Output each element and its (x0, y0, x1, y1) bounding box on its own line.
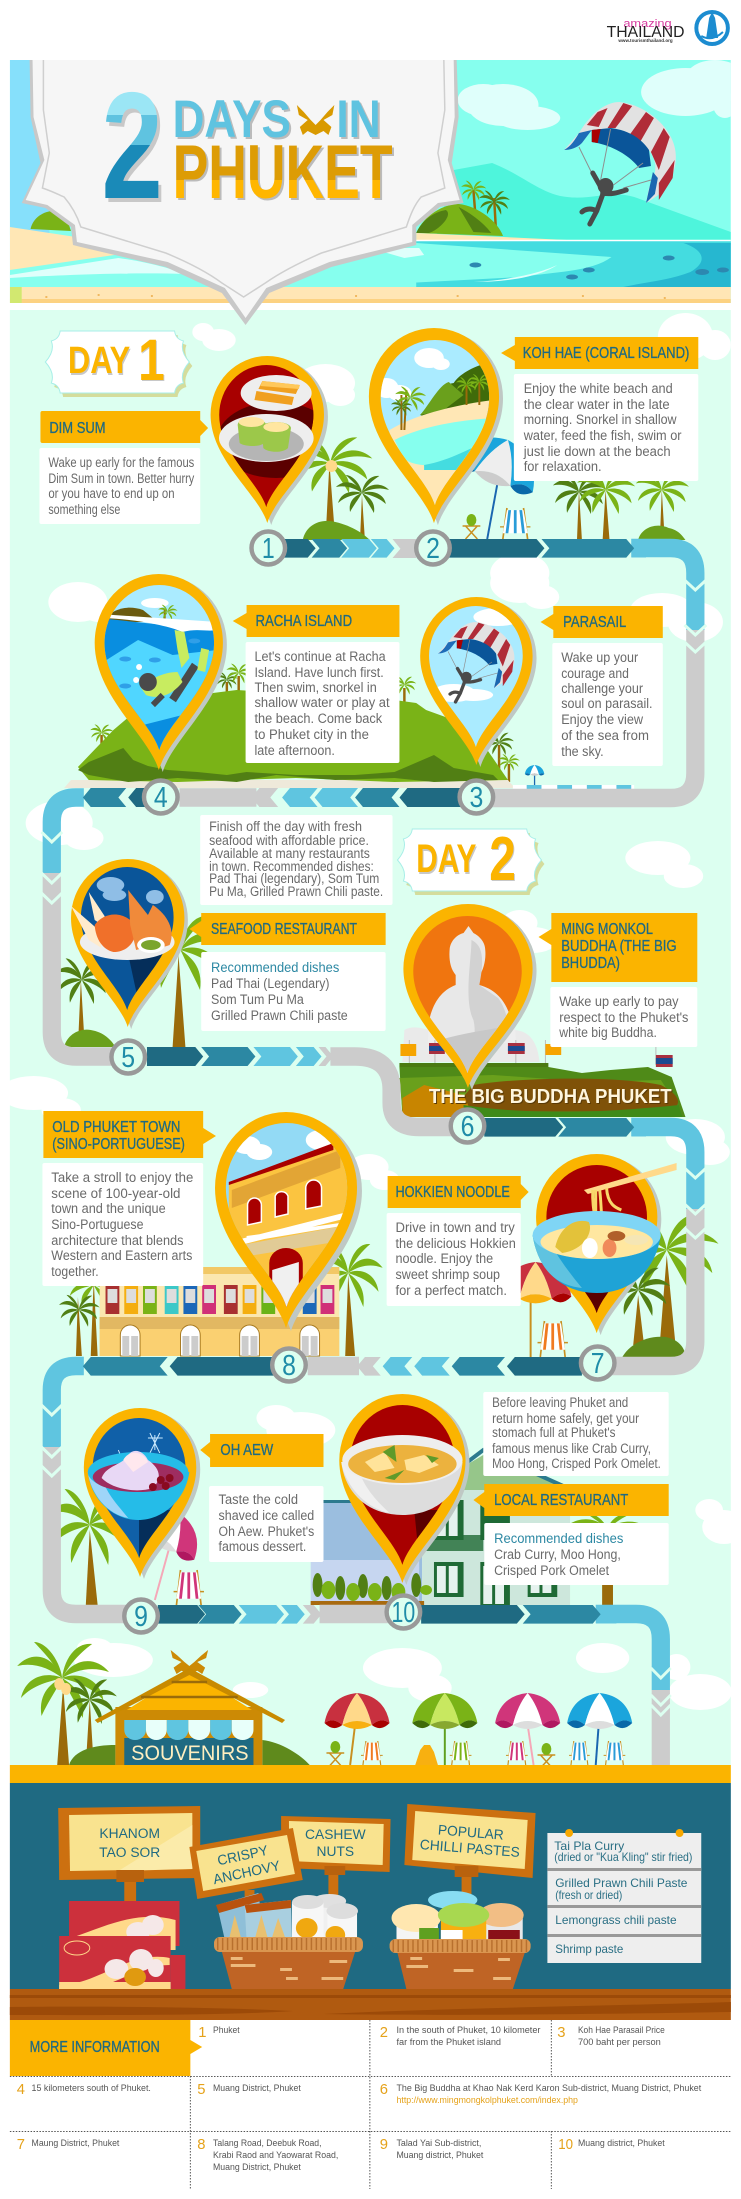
dish: dumplings (219, 414, 314, 462)
route markers 1 to 10: 1 (262, 533, 275, 565)
logo: amazing Thailand: www.tourismthailand.org (617, 38, 673, 43)
more information table: http://www.mingmongkolphuket.com/index.php (396, 2094, 578, 2105)
panel: local restaurant: return home safely, get your (492, 1411, 640, 1426)
clouds (0, 313, 741, 1710)
panel: local restaurant: Moo Hong, Crisped Pork Omelet. (492, 1456, 661, 1471)
pin 2: koh hae island (369, 328, 503, 525)
route: chevron segments (83, 539, 646, 1624)
panel: parasail: the sky. (561, 744, 604, 759)
route: vertical chevrons (41, 580, 706, 1715)
panel: old phuket town (42, 1111, 216, 1286)
panel: parasail: PARASAIL (563, 614, 627, 631)
panel: old phuket town: (SINO-PORTUGUESE) (52, 1136, 185, 1153)
title: 2 Days in Phuket (102, 60, 395, 234)
pin 3: parasail (420, 597, 537, 767)
panel: old phuket town: town and the unique (51, 1201, 166, 1216)
panel: dim sum: Wake up early for the famous (48, 455, 195, 470)
logo: amazing Thailand (607, 18, 684, 43)
panel: old phuket town: architecture that blends (51, 1233, 184, 1248)
logo: amazing Thailand: amazing (623, 18, 672, 30)
note board: popular chilli pastes list: Tai Pla Curry (554, 1841, 625, 1853)
shelf band (10, 1765, 731, 1989)
scene: old town shophouses (59, 1242, 383, 1356)
panel: ming monkol buddha (539, 913, 697, 1047)
panel: local restaurant (473, 1392, 669, 1585)
route markers 1 to 10: 10 (392, 1597, 415, 1629)
panel: ming monkol buddha: MING MONKOL (561, 921, 653, 938)
pin 6: big buddha (403, 904, 537, 1090)
more information table: 3 (557, 2025, 565, 2041)
note board: popular chilli pastes list: Shrimp paste (555, 1944, 623, 1956)
panel: oh aew: OH AEW (220, 1442, 274, 1459)
logo: tourism authority seal (696, 12, 728, 44)
badge: day 1: DAY (68, 339, 130, 381)
panel: old phuket town: Sino-Portuguese (51, 1217, 144, 1232)
panel: dim sum: or you have to end up on (48, 486, 175, 501)
panel: koh hae: KOH HAE (CORAL ISLAND) (523, 345, 689, 362)
hero clouds (458, 60, 741, 130)
panel: seafood restaurant: in town. Recommended dishes: (209, 859, 374, 874)
title: 2 Days in Phuket: DAYS (175, 92, 293, 151)
badge: day 1 (45, 329, 192, 397)
dish: shaved ice (88, 1451, 189, 1520)
panel: seafood restaurant: Recommended dishes (211, 960, 340, 975)
title: 2 Days in Phuket: IN (338, 92, 383, 151)
panel: seafood restaurant: Available at many restaurants (209, 846, 370, 861)
panel: koh hae: water, feed the fish, swim or (523, 428, 682, 443)
pin 1: dim sum (211, 356, 335, 525)
note board: popular chilli pastes list: Grilled Prawn Chili Paste (555, 1878, 687, 1890)
more information table: 10 (558, 2137, 573, 2153)
hero mountains (434, 163, 731, 245)
panel: local restaurant: LOCAL RESTAURANT (494, 1492, 629, 1509)
more information table: 1 (198, 2025, 206, 2041)
panel: racha island: shallow water or play at (254, 695, 390, 710)
sign: cashew nuts (281, 1816, 391, 1898)
title: 2 Days in Phuket: 2 (102, 60, 163, 230)
heading: more information (10, 2020, 202, 2076)
more information table: 7 (17, 2137, 25, 2153)
route markers 1 to 10: 8 (282, 1350, 296, 1382)
souvenir row: palms, hut, umbrellas (17, 1642, 632, 1768)
more information table: Phuket (213, 2024, 240, 2035)
panel: hokkien noodle: noodle. Enjoy the (396, 1251, 493, 1266)
panel: old phuket town: Take a stroll to enjoy the (51, 1170, 193, 1185)
badge: day 2: 2 (490, 826, 517, 895)
panel: hokkien noodle: HOKKIEN NOODLE (396, 1184, 510, 1201)
scene: row one palms and beach (290, 424, 689, 540)
wooden shelf (10, 1989, 731, 2020)
icon: souvenir hut: SOUVENIRS (131, 1742, 249, 1765)
title: 2 Days in Phuket: IN (336, 90, 381, 149)
panel: local restaurant: Crisped Pork Omelet (494, 1563, 609, 1578)
panel: parasail: Enjoy the view (561, 712, 643, 727)
note board: popular chilli pastes list (547, 1829, 701, 1963)
sign: crispy anchovy (189, 1828, 303, 1904)
panel: parasail: Wake up your (561, 650, 639, 665)
panel: racha island (233, 605, 399, 763)
badge: day 2: DAY (416, 837, 476, 881)
panel: ming monkol buddha: respect to the Phuket's (559, 1010, 689, 1025)
panel: koh hae: Enjoy the white beach and (524, 381, 673, 396)
sign: khanom tao sor: TAO SOR (99, 1844, 160, 1860)
panel: dim sum (39, 411, 208, 524)
panel: koh hae (501, 337, 698, 481)
panel: racha island: late afternoon. (254, 743, 335, 758)
more information table: Muang District, Phuket (213, 2082, 301, 2093)
pin 8: old town (215, 1112, 362, 1331)
more information table: 8 (197, 2137, 205, 2153)
panel: racha island: Island. Have lunch first. (254, 665, 384, 680)
panel: oh aew: famous dessert. (219, 1539, 306, 1554)
dish: grilled prawns (71, 890, 175, 960)
route markers 1 to 10 (111, 532, 614, 1633)
panel: dim sum: something else (48, 502, 120, 517)
panel: koh hae: just lie down at the beach (523, 444, 671, 459)
panel: koh hae: for relaxation. (524, 459, 602, 474)
more information table: Krabi Raod and Yaowarat Road, (213, 2149, 338, 2160)
panel: racha island: the beach. Come back (254, 711, 382, 726)
dish: curry bowl (341, 1435, 463, 1515)
panel: koh hae: morning. Snorkel in shallow (524, 412, 677, 427)
route: grey and blue curves (52, 548, 695, 1765)
panel: oh aew (200, 1434, 324, 1562)
pin 4: racha island snorkel (95, 574, 227, 772)
hero palms and hill (416, 181, 510, 236)
panel: old phuket town: OLD PHUKET TOWN (52, 1119, 180, 1136)
panel: old phuket town: scene of 100-year-old (51, 1186, 180, 1201)
panel: hokkien noodle (387, 1176, 529, 1306)
parachute (564, 102, 676, 224)
heading: more information: MORE INFORMATION (30, 2039, 160, 2056)
scene: hokkien beach (500, 1212, 719, 1357)
hero sand strip (10, 287, 731, 303)
panel: oh aew: Oh Aew. Phuket's (219, 1524, 314, 1539)
panel: dim sum: Dim Sum in town. Better hurry (48, 471, 195, 486)
panel: hokkien noodle: for a perfect match. (396, 1283, 507, 1298)
panel: racha island: RACHA ISLAND (255, 613, 352, 630)
panel: oh aew: Taste the cold (219, 1492, 298, 1507)
route markers 1 to 10: 3 (469, 782, 483, 814)
panel: racha island: Then swim, snorkel in (254, 680, 377, 695)
route markers 1 to 10: 9 (134, 1601, 148, 1633)
more information table: Muang district, Phuket (578, 2137, 665, 2148)
title: 2 Days in Phuket: PHUKET (175, 132, 395, 216)
more information table: Talang Road, Deebuk Road, (213, 2137, 322, 2148)
more information table: Muang district, Phuket (396, 2149, 484, 2160)
title: 2 Days in Phuket: DAYS (173, 90, 291, 149)
panel: racha island: Let's continue at Racha (254, 649, 386, 664)
panel: local restaurant: Before leaving Phuket and (492, 1395, 628, 1410)
more information table: 2 (380, 2025, 388, 2041)
more information table: 700 baht per person (578, 2036, 661, 2047)
route markers 1 to 10: 2 (426, 533, 440, 565)
more information table: 9 (380, 2137, 388, 2153)
panel: hokkien noodle: Drive in town and try (396, 1220, 515, 1235)
icon: souvenir hut (95, 1650, 285, 1765)
sign text: the big buddha phuket: THE BIG BUDDHA PHUKET (429, 1086, 672, 1108)
badge: day 1: 1 (138, 329, 165, 393)
panel: seafood restaurant: Pad Thai (legendary), Som Tum (209, 871, 379, 886)
note board: popular chilli pastes list: (dried or "Kua Kling" stir fried) (554, 1852, 693, 1864)
more information table: Muang District, Phuket (213, 2161, 301, 2172)
route markers 1 to 10: 4 (154, 782, 168, 814)
more information table: 6 (380, 2082, 388, 2098)
pin 9: oh aew (84, 1408, 200, 1579)
route markers 1 to 10: 5 (121, 1042, 135, 1074)
more information table: 15 kilometers south of Phuket. (32, 2082, 151, 2093)
icon: snorkeller (133, 630, 209, 705)
panel: ming monkol buddha: BUDDHA (THE BIG (561, 938, 677, 955)
more information table: 5 (197, 2082, 205, 2098)
panel: parasail: of the sea from (561, 728, 649, 743)
panel: ming monkol buddha: Wake up early to pay (559, 994, 679, 1009)
panel: dim sum: DIM SUM (49, 420, 106, 437)
sign: crispy anchovy: ANCHOVY (212, 1857, 282, 1887)
more information table: Maung District, Phuket (32, 2137, 120, 2148)
panel: seafood restaurant: Som Tum Pu Ma (211, 992, 304, 1007)
sign: khanom tao sor (58, 1806, 200, 1905)
panel: seafood restaurant: SEAFOOD RESTAURANT (211, 921, 358, 938)
panel: hokkien noodle: sweet shrimp soup (396, 1267, 500, 1282)
scene: oh aew palm and umbrella (50, 1489, 211, 1606)
panel: ming monkol buddha: BHUDDA) (561, 955, 620, 972)
basket: chilli paste tubs (390, 1891, 531, 1989)
panel: parasail: soul on parasail. (561, 696, 653, 711)
panel: old phuket town: Western and Eastern arts (51, 1248, 193, 1263)
scene: local restaurant building (311, 1450, 647, 1606)
panel: oh aew: shaved ice called (219, 1508, 314, 1523)
pin 7: hokkien noodle (533, 1154, 677, 1335)
basket: crispy anchovy and cashew (214, 1893, 363, 1989)
panel: seafood restaurant (189, 815, 393, 1031)
more information table: Koh Hae Parasail Price (578, 2024, 665, 2035)
more information table: far from the Phuket island (396, 2036, 501, 2047)
sign: crispy anchovy: CRISPY (216, 1842, 269, 1868)
headband: banner shield (22, 60, 464, 325)
more information table: The Big Buddha at Khao Nak Kerd Karon Sub-district, Muang District, Phuket (396, 2082, 702, 2093)
panel: local restaurant: Recommended dishes (494, 1531, 624, 1546)
sign: popular chilli pastes (404, 1804, 536, 1902)
badge: day 2: DAY (417, 839, 477, 883)
title: 2 Days in Phuket: PHUKET (173, 130, 393, 214)
more information table (10, 2020, 731, 2199)
route markers 1 to 10: 6 (461, 1111, 474, 1143)
panel: parasail (540, 606, 663, 766)
sign: popular chilli pastes: CHILLI PASTES (419, 1836, 520, 1860)
panel: hokkien noodle: the delicious Hokkien (396, 1236, 516, 1251)
main mint background (10, 310, 731, 1765)
panel: koh hae: the clear water in the late (524, 397, 670, 412)
scene: seafood palms (56, 914, 225, 1047)
panel: local restaurant: famous menus like Crab Curry, (492, 1441, 651, 1456)
panel: parasail: courage and (561, 666, 629, 681)
sign: cashew nuts: NUTS (317, 1843, 354, 1859)
dish: noodle bowl (533, 1163, 677, 1293)
panel: seafood restaurant: Grilled Prawn Chili paste (211, 1008, 348, 1023)
panel: racha island: to Phuket city in the (254, 727, 369, 742)
panel: seafood restaurant: Finish off the day with fresh (209, 819, 362, 834)
panel: seafood restaurant: Pu Ma, Grilled Prawn Chili paste. (209, 884, 383, 899)
badge: day 2 (397, 825, 544, 895)
panel: local restaurant: stomach full at Phuket's (492, 1425, 616, 1440)
hero banner (10, 60, 741, 303)
scene: big buddha hill (399, 985, 685, 1117)
more information table: Talad Yai Sub-district, (396, 2137, 481, 2148)
sign: cashew nuts: CASHEW (305, 1826, 366, 1842)
pin 10: local restaurant (339, 1394, 469, 1585)
panel: parasail: challenge your (561, 681, 644, 696)
pin 5: seafood (71, 859, 188, 1029)
scene: island (64, 664, 634, 789)
panel: seafood restaurant: seafood with affordable price. (209, 833, 369, 848)
badge: day 1: 1 (139, 330, 166, 394)
panel: local restaurant: Crab Curry, Moo Hong, (494, 1547, 621, 1562)
badge: day 2: 2 (489, 825, 516, 894)
panel: seafood restaurant: Pad Thai (Legendary) (211, 976, 329, 991)
panel: ming monkol buddha: white big Buddha. (558, 1025, 657, 1040)
route path (41, 539, 706, 1765)
boxes: khanom tao sor (59, 1901, 185, 1989)
sign: popular chilli pastes: POPULAR (437, 1821, 504, 1843)
note board: popular chilli pastes list: Lemongrass chili paste (555, 1915, 677, 1927)
sign text: the big buddha phuket: THE BIG BUDDHA PHUKET (430, 1087, 673, 1109)
note board: popular chilli pastes list: (fresh or dried) (555, 1890, 623, 1902)
logo: amazing Thailand: THAILAND (607, 24, 684, 41)
dish: spring rolls (241, 375, 312, 411)
more information table: 4 (17, 2082, 25, 2098)
panel: old phuket town: together. (51, 1264, 99, 1279)
sign: khanom tao sor: KHANOM (99, 1825, 160, 1841)
title: 2 Days in Phuket: 2 (105, 64, 166, 234)
route markers 1 to 10: 7 (591, 1348, 605, 1380)
more information table: In the south of Phuket, 10 kilometer (396, 2024, 540, 2035)
badge: day 1: DAY (69, 341, 131, 383)
hero beach and sea (10, 211, 731, 287)
